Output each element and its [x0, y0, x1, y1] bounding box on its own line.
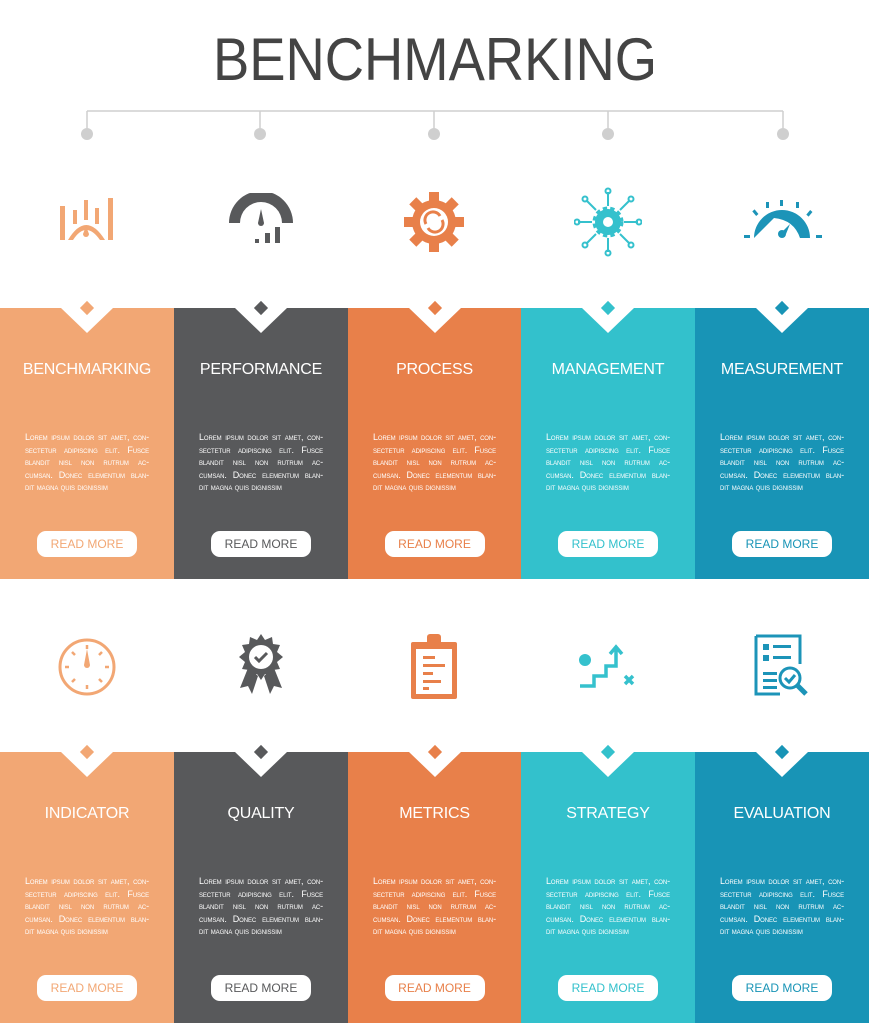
- panel: strategy: STRATEGY: [566, 805, 650, 822]
- panel: evaluation: EVALUATION: [734, 805, 830, 822]
- panel: strategy: READ MORE: [572, 981, 644, 995]
- panel: indicator: cumsan. Donec elementum blan-: [25, 914, 149, 924]
- panel: benchmarking: BENCHMARKING: [23, 361, 151, 378]
- panel: strategy: blandit nisl non rutrum ac-: [546, 901, 670, 911]
- panel: performance: PERFORMANCE: [200, 361, 322, 378]
- panel: process: dit magna quis dignissim: [373, 482, 456, 492]
- panel: benchmarking: dit magna quis dignissim: [25, 482, 108, 492]
- panel: process: [348, 308, 521, 579]
- panel: performance: sectetur adipiscing elit. Fusce: [199, 444, 323, 454]
- panel: performance: dit magna quis dignissim: [199, 482, 282, 492]
- panel: measurement: dit magna quis dignissim: [720, 482, 803, 492]
- panel: benchmarking: blandit nisl non rutrum ac-: [25, 457, 149, 467]
- panel: performance: Lorem ipsum dolor sit amet, con-: [199, 432, 323, 442]
- panel: process: cumsan. Donec elementum blan-: [373, 470, 496, 480]
- panel: measurement: sectetur adipiscing elit. Fusce: [720, 444, 844, 454]
- panel: strategy: [521, 752, 695, 1023]
- panel: quality: READ MORE: [225, 981, 297, 995]
- panel: performance: [174, 308, 348, 579]
- panel: measurement: Lorem ipsum dolor sit amet, con-: [720, 432, 844, 442]
- connector tree: [81, 110, 789, 140]
- panel: indicator: INDICATOR: [45, 805, 129, 822]
- panel: strategy: sectetur adipiscing elit. Fusce: [546, 888, 670, 898]
- panel: process: PROCESS: [396, 361, 473, 378]
- panel: measurement: cumsan. Donec elementum blan-: [720, 470, 844, 480]
- panel: evaluation: dit magna quis dignissim: [720, 926, 803, 936]
- panel: measurement: MEASUREMENT: [721, 361, 843, 378]
- icon: process gear: [404, 192, 464, 252]
- panel: evaluation: [695, 752, 869, 1023]
- panel: benchmarking: [0, 308, 174, 579]
- panel: benchmarking: READ MORE: [51, 537, 123, 551]
- panel: benchmarking: Lorem ipsum dolor sit amet, con-: [25, 432, 149, 442]
- panel: quality: blandit nisl non rutrum ac-: [199, 901, 323, 911]
- panel: indicator: blandit nisl non rutrum ac-: [25, 901, 149, 911]
- panel: measurement: [695, 308, 869, 579]
- panel: performance: cumsan. Donec elementum blan-: [199, 470, 323, 480]
- icon: evaluation document: [754, 634, 808, 696]
- panel: management: sectetur adipiscing elit. Fusce: [546, 444, 670, 454]
- panel: strategy: cumsan. Donec elementum blan-: [546, 914, 670, 924]
- panel: measurement: READ MORE: [746, 537, 818, 551]
- panel: indicator: Lorem ipsum dolor sit amet, con-: [25, 876, 149, 886]
- panel: process: sectetur adipiscing elit. Fusce: [373, 444, 496, 454]
- panel: process: Lorem ipsum dolor sit amet, con-: [373, 432, 496, 442]
- panel: quality: QUALITY: [227, 805, 295, 822]
- panel: metrics: sectetur adipiscing elit. Fusce: [373, 888, 496, 898]
- panel: strategy: dit magna quis dignissim: [546, 926, 629, 936]
- panel: indicator: sectetur adipiscing elit. Fusce: [25, 888, 149, 898]
- icon: benchmarking bars: [60, 198, 113, 240]
- panel: quality: sectetur adipiscing elit. Fusce: [199, 888, 323, 898]
- panel: quality: dit magna quis dignissim: [199, 926, 282, 936]
- panel: indicator: dit magna quis dignissim: [25, 926, 108, 936]
- panel: metrics: cumsan. Donec elementum blan-: [373, 914, 496, 924]
- panel: process: blandit nisl non rutrum ac-: [373, 457, 496, 467]
- panel: quality: cumsan. Donec elementum blan-: [199, 914, 323, 924]
- panel: management: dit magna quis dignissim: [546, 482, 629, 492]
- panel: evaluation: Lorem ipsum dolor sit amet, con-: [720, 876, 844, 886]
- panel: indicator: [0, 752, 174, 1023]
- panel: benchmarking: cumsan. Donec elementum blan-: [25, 470, 149, 480]
- icon: indicator dial: [58, 638, 116, 696]
- panel: evaluation: sectetur adipiscing elit. Fusce: [720, 888, 844, 898]
- panel: quality: Lorem ipsum dolor sit amet, con-: [199, 876, 323, 886]
- panel: performance: blandit nisl non rutrum ac-: [199, 457, 323, 467]
- panel: process: READ MORE: [398, 537, 471, 551]
- panel: indicator: READ MORE: [51, 981, 123, 995]
- icon: quality badge: [239, 634, 283, 694]
- panel: management: cumsan. Donec elementum blan-: [546, 470, 670, 480]
- panel: evaluation: blandit nisl non rutrum ac-: [720, 901, 844, 911]
- icon: strategy steps: [579, 644, 634, 688]
- panel: measurement: blandit nisl non rutrum ac-: [720, 457, 844, 467]
- panel: performance: READ MORE: [225, 537, 297, 551]
- panel: metrics: dit magna quis dignissim: [373, 926, 456, 936]
- panel: metrics: blandit nisl non rutrum ac-: [373, 901, 496, 911]
- panel: management: MANAGEMENT: [552, 361, 664, 378]
- panel: benchmarking: sectetur adipiscing elit. Fusce: [25, 444, 149, 454]
- panel: metrics: METRICS: [399, 805, 470, 822]
- panel: strategy: Lorem ipsum dolor sit amet, con-: [546, 876, 670, 886]
- icon: performance gauge: [229, 193, 293, 243]
- panel: metrics: READ MORE: [398, 981, 471, 995]
- panel: quality: [174, 752, 348, 1023]
- panel: management: READ MORE: [572, 537, 644, 551]
- panel: management: blandit nisl non rutrum ac-: [546, 457, 670, 467]
- icon: measurement speedometer: [744, 200, 822, 238]
- panel: management: Lorem ipsum dolor sit amet, con-: [546, 432, 670, 442]
- icon: metrics clipboard: [411, 634, 457, 699]
- panel: evaluation: READ MORE: [746, 981, 818, 995]
- icon: management network gear: [574, 188, 642, 256]
- panel: metrics: Lorem ipsum dolor sit amet, con-: [373, 876, 496, 886]
- panel: management: [521, 308, 695, 579]
- panel: evaluation: cumsan. Donec elementum blan-: [720, 914, 844, 924]
- panel: metrics: [348, 752, 521, 1023]
